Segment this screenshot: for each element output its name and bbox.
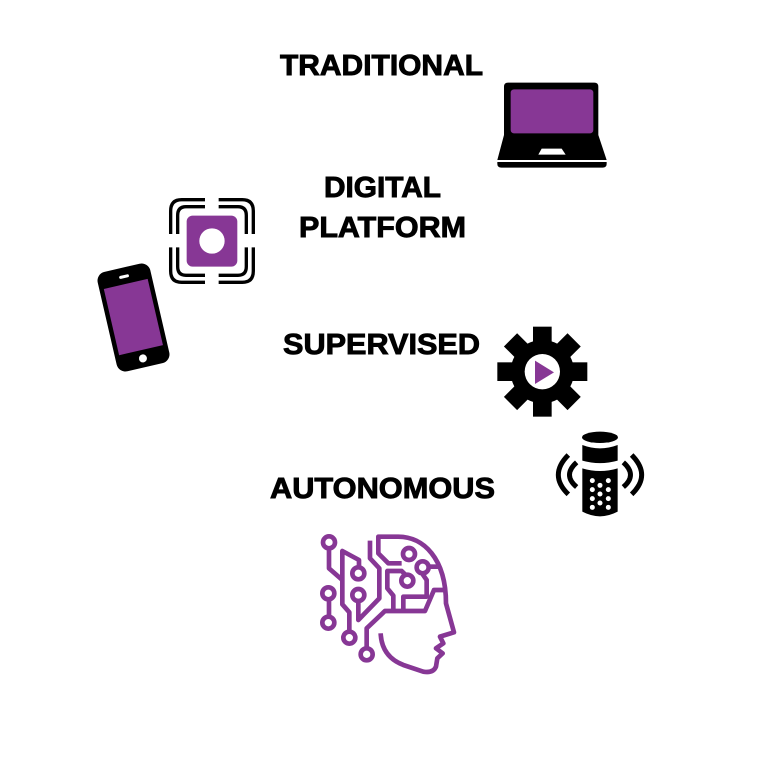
heading: digital platform: DIGITAL [324, 172, 441, 204]
icon: camera focus square [171, 200, 253, 282]
icon: smartphone [96, 262, 171, 373]
icon: laptop [497, 83, 607, 168]
heading: digital platform: PLATFORM [299, 212, 466, 244]
icon: AI head with circuits [322, 536, 454, 672]
heading: traditional: TRADITIONAL [280, 50, 483, 82]
icon: gear with play button [497, 327, 587, 417]
icon: smart speaker [558, 432, 642, 516]
heading: autonomous: AUTONOMOUS [270, 473, 495, 505]
heading: supervised: SUPERVISED [283, 329, 480, 361]
heading: digital platform [299, 172, 466, 244]
